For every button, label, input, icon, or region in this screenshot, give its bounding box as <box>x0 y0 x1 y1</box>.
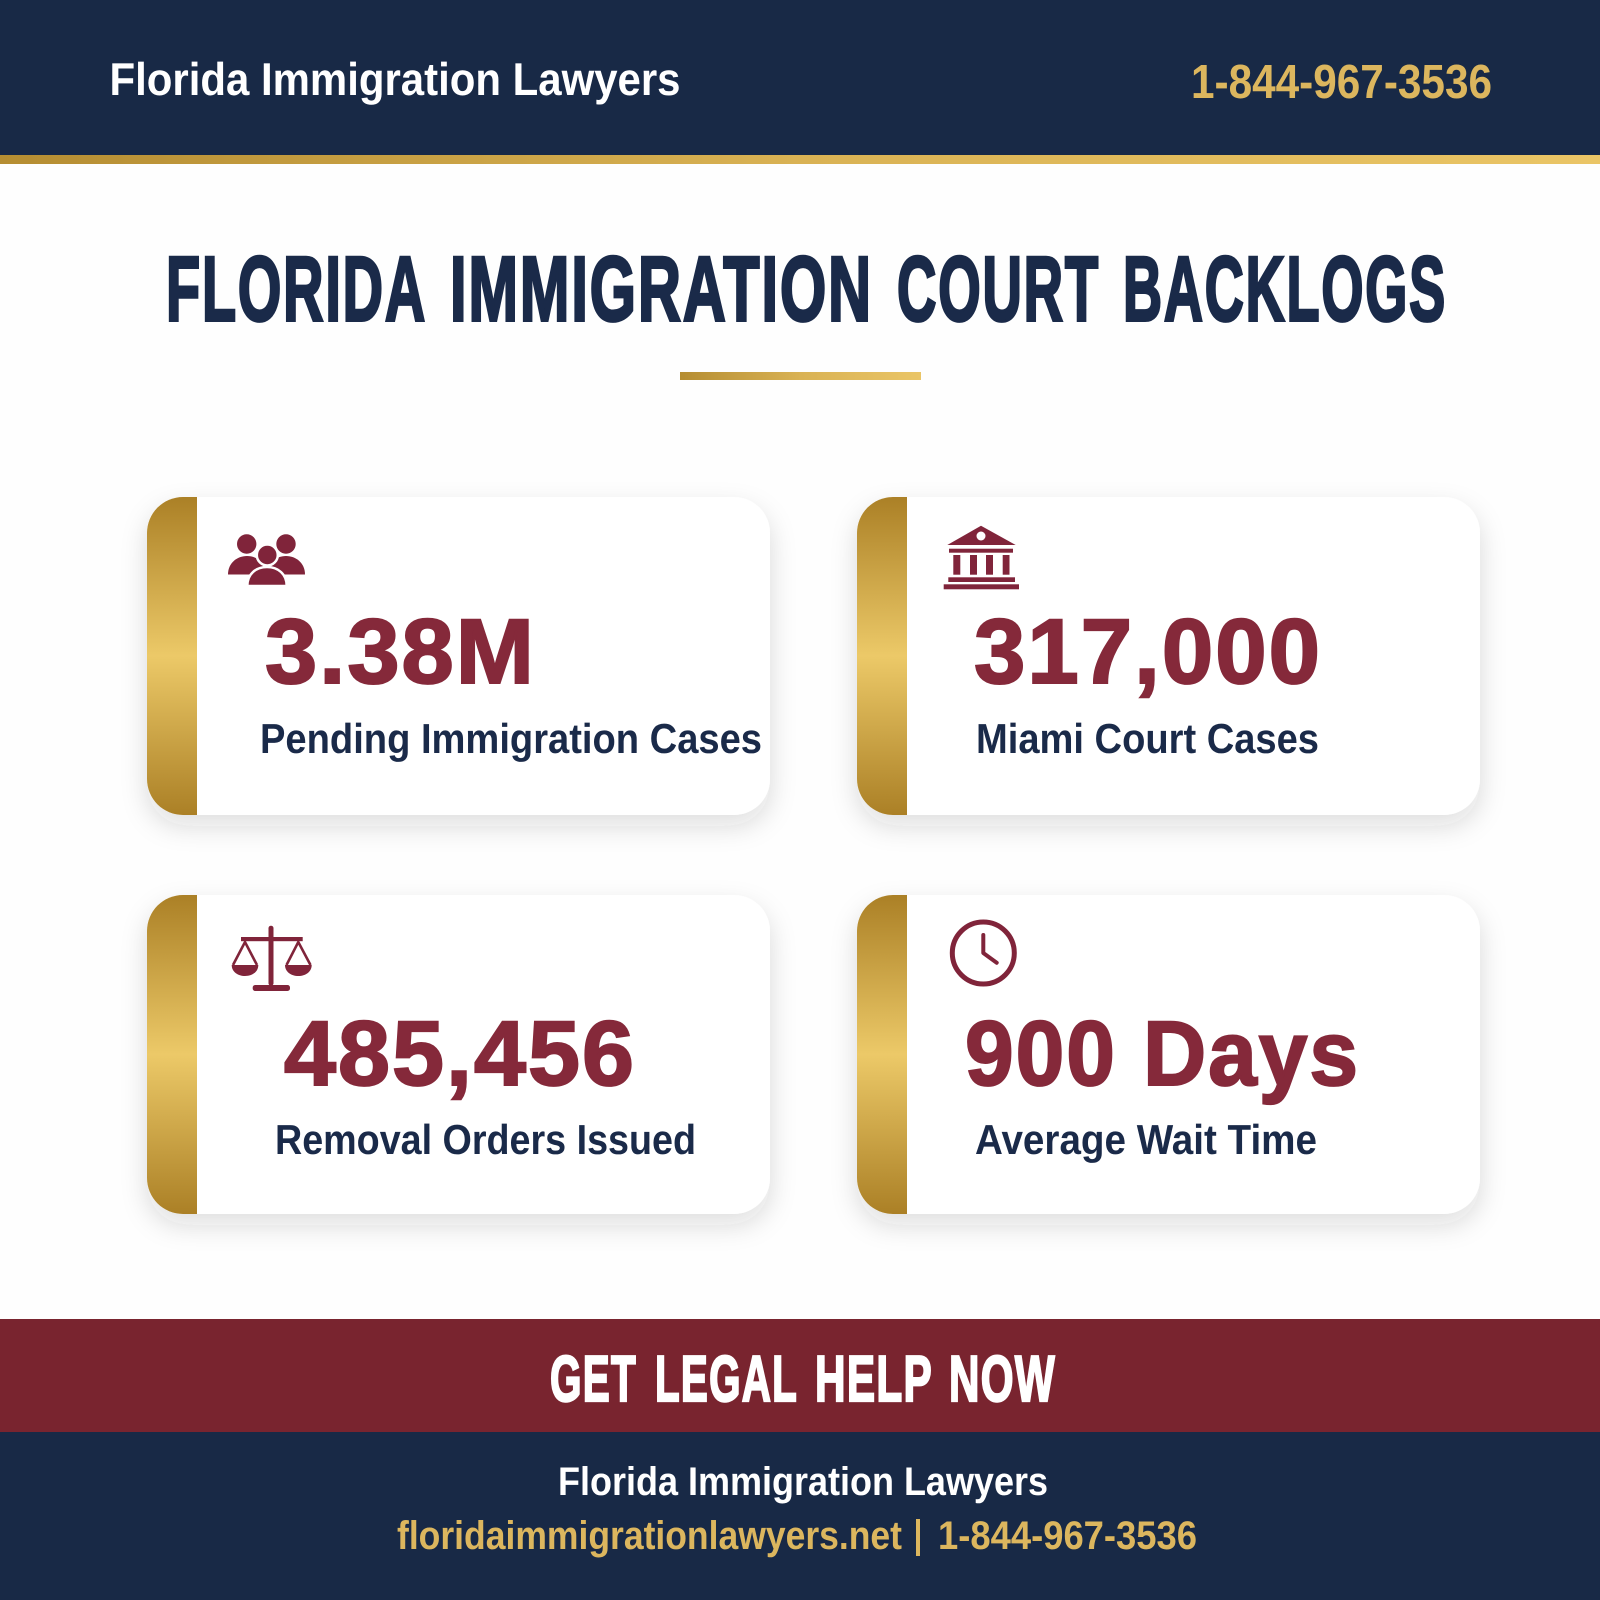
footer website and phone: floridaimmigrationlawyers.net <box>397 1514 902 1558</box>
title: COURT <box>897 238 1100 340</box>
stat label: Miami Court Cases <box>976 715 1319 762</box>
header phone number: 1-844-967-3536 <box>1191 56 1492 109</box>
stat label: Average Wait Time <box>975 1116 1317 1163</box>
stat value: 900 Days <box>965 1003 1360 1105</box>
icon: courthouse <box>944 526 1019 589</box>
stat value: 3.38M <box>265 601 536 703</box>
title: FLORIDA <box>166 238 427 340</box>
stat label: Removal Orders Issued <box>275 1116 696 1163</box>
stat value: 485,456 <box>284 1003 636 1105</box>
panel: average wait time <box>857 895 1480 1214</box>
title underline <box>680 372 921 380</box>
footer website and phone: 1-844-967-3536 <box>938 1514 1197 1558</box>
call to action text: HELP <box>815 1342 933 1415</box>
panel: removal orders issued <box>147 895 770 1214</box>
panel: miami court cases <box>857 497 1480 815</box>
call to action text: GET <box>550 1342 637 1415</box>
call to action text: LEGAL <box>655 1342 798 1415</box>
icon: clock <box>952 922 1014 984</box>
footer <box>0 1432 1600 1600</box>
footer firm name: Florida Immigration Lawyers <box>558 1460 1048 1504</box>
title <box>166 238 1447 340</box>
icon: people <box>228 534 305 586</box>
panel: pending immigration cases <box>147 497 770 815</box>
stat value: 317,000 <box>974 601 1322 703</box>
call to action text <box>550 1342 1056 1415</box>
icon: scales of justice <box>232 926 312 991</box>
header firm name: Florida Immigration Lawyers <box>110 53 680 105</box>
stat label: Pending Immigration Cases <box>260 715 762 762</box>
call to action band <box>0 1319 1600 1432</box>
title: IMMIGRATION <box>450 238 873 340</box>
header bar <box>0 0 1600 164</box>
call to action text: NOW <box>949 1342 1056 1415</box>
